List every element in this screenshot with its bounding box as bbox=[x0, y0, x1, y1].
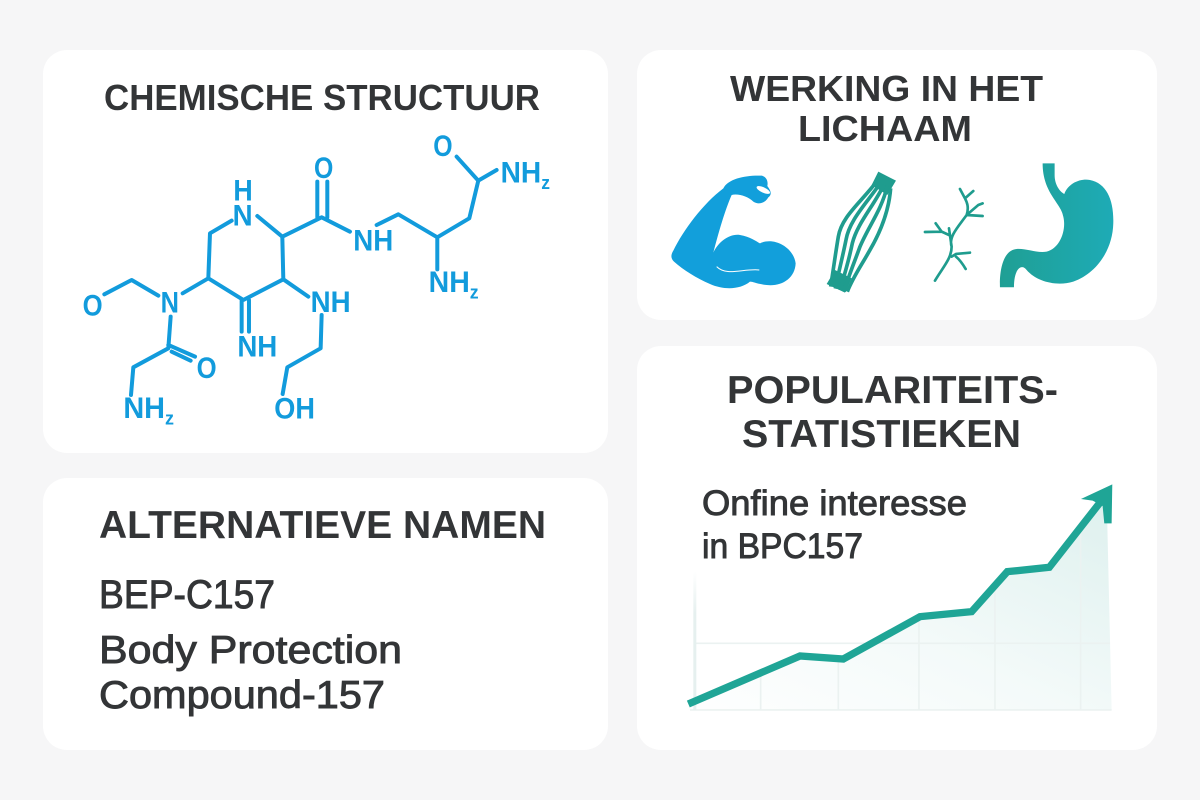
chemical structure diagram: O bbox=[83, 290, 103, 323]
panel: alternatieve namen bbox=[43, 478, 608, 750]
panel: werking in het lichaam bbox=[637, 50, 1157, 320]
body icons bbox=[671, 163, 1113, 293]
chemical structure diagram: OH bbox=[274, 393, 315, 426]
heading: werking in het lichaam bbox=[730, 68, 1043, 149]
heading: populariteits-statistieken: POPULARITEITS- bbox=[727, 369, 1058, 412]
chemical structure diagram: NH bbox=[429, 266, 472, 299]
icon: nerve branch bbox=[925, 189, 983, 281]
heading: chemische structuur: CHEMISCHE STRUCTUUR bbox=[104, 77, 540, 118]
chemical structure diagram: N bbox=[233, 199, 253, 232]
heading: alternatieve namen: ALTERNATIEVE NAMEN bbox=[99, 504, 546, 547]
icon: flexed arm bbox=[671, 176, 796, 288]
chemical structure diagram: O bbox=[433, 130, 453, 163]
chemical structure diagram: O bbox=[314, 152, 333, 185]
chart label: Onfine interesse bbox=[702, 484, 967, 523]
chemical structure diagram: NH bbox=[237, 330, 277, 363]
chemical structure diagram: O bbox=[197, 352, 217, 385]
line chart: online interest rising bbox=[688, 484, 1112, 710]
chemical structure diagram: z bbox=[165, 408, 174, 429]
chemical structure diagram: z bbox=[541, 172, 550, 193]
panel: chemische structuur bbox=[43, 50, 608, 453]
heading: populariteits-statistieken bbox=[727, 369, 1058, 456]
icon: muscle fibres bbox=[827, 172, 896, 293]
chemical structure diagram bbox=[83, 130, 550, 429]
chemical structure diagram: NH bbox=[353, 225, 393, 258]
name: Body Protection Compound-157: Compound-157 bbox=[99, 674, 385, 717]
chart label: in BPC157 bbox=[702, 527, 863, 566]
heading: werking in het lichaam: LICHAAM bbox=[798, 108, 972, 149]
chemical structure diagram: N bbox=[161, 287, 179, 320]
heading: werking in het lichaam: WERKING IN HET bbox=[730, 68, 1043, 109]
panel: populariteitsstatistieken bbox=[637, 346, 1157, 750]
name: Body Protection Compound-157 bbox=[99, 629, 402, 717]
name: BEP-C157: BEP-C157 bbox=[99, 573, 275, 617]
chemical structure diagram: NH bbox=[501, 156, 544, 189]
chart label bbox=[702, 484, 967, 566]
chemical structure diagram: NH bbox=[311, 286, 351, 319]
name: Body Protection Compound-157: Body Protection bbox=[99, 629, 402, 672]
icon: stomach bbox=[1000, 163, 1113, 287]
heading: populariteits-statistieken: STATISTIEKEN bbox=[742, 413, 1021, 456]
chemical structure diagram: NH bbox=[123, 392, 167, 425]
chemical structure diagram: z bbox=[470, 282, 479, 303]
chemical structure diagram: H bbox=[233, 175, 253, 208]
